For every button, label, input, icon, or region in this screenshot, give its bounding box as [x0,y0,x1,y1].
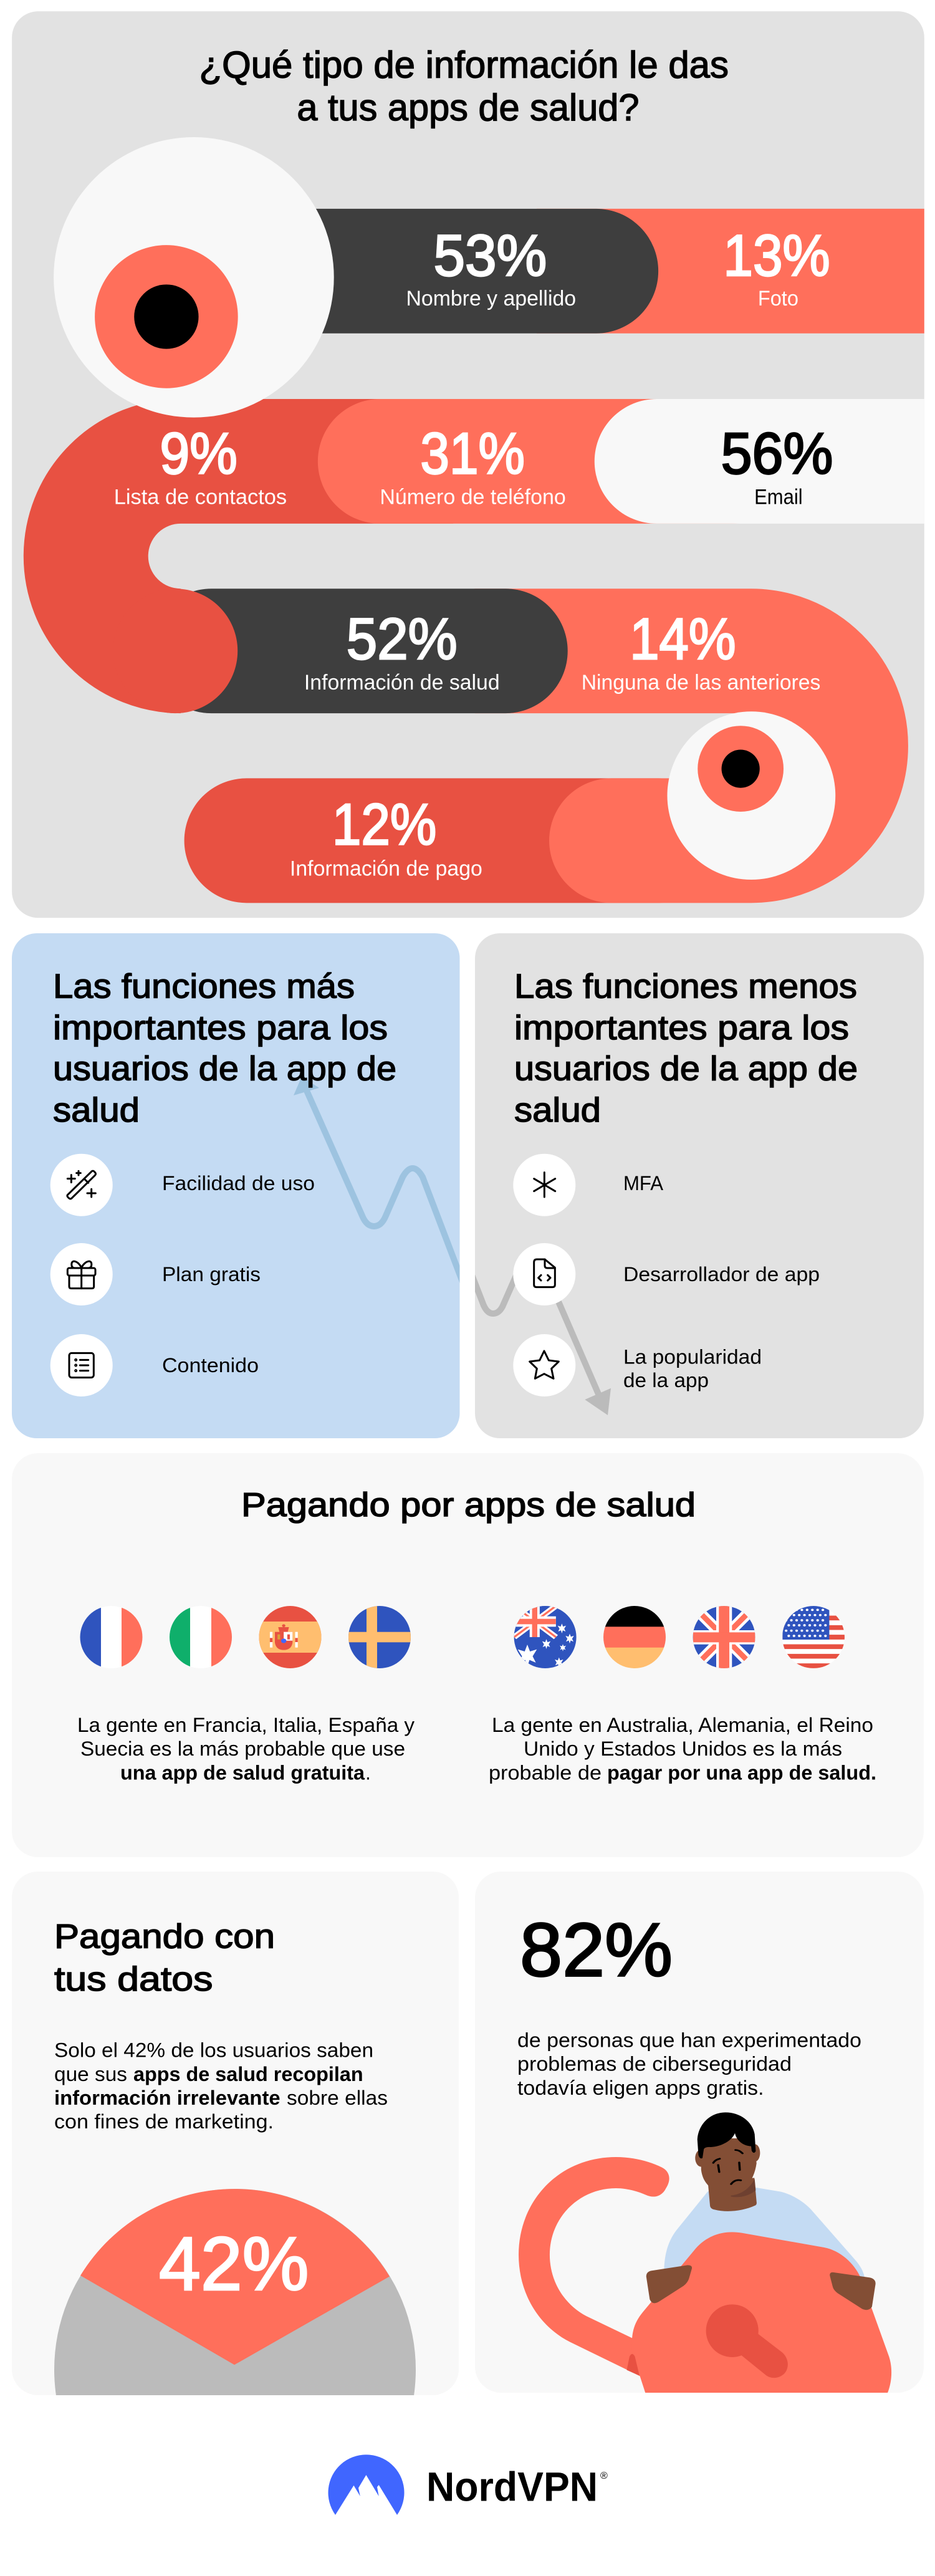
label: app popularity [623,1346,762,1391]
heading: most important: Las funciones más [53,967,355,1006]
stat: 12% payment: Información de pago [290,857,482,880]
stat: 52% health info [304,606,500,694]
text: paid app countries: probable de [489,1761,602,1784]
stat: 53% name [406,223,576,310]
icon: gift [50,1243,113,1305]
panel: paying with your data [54,1923,416,2395]
text block [517,2029,861,2099]
text block: con fines de marketing. [54,2110,274,2133]
heading: most important: salud [53,1090,140,1129]
pie chart: 42% [54,2189,416,2395]
flag: Sweden [348,1606,411,1668]
label: app popularity: de la app [623,1369,709,1391]
icon: star [513,1334,575,1396]
text block [54,2039,388,2133]
heading [54,1917,275,1998]
stat: 52% health info: 52% [347,606,458,671]
text block: apps de salud recopilan [133,2063,363,2085]
heading: tus datos [54,1959,213,1998]
icon: magic wand [50,1154,113,1216]
stat: 9% contacts: Lista de contactos [114,485,287,509]
panel: least important features [471,933,924,1438]
logo: NordVPN [328,2454,608,2515]
text block: de personas que han experimentado [517,2029,861,2051]
stat: 56% email: 56% [721,421,833,486]
title [199,43,729,128]
text: free app countries: La gente en Francia, Italia, España y [77,1714,415,1736]
flag: France [80,1606,143,1668]
icon: large eye [54,137,334,418]
heading: Pagando con [54,1917,275,1956]
big number: 82% [520,1908,673,1992]
heading: least important: Las funciones menos [514,967,857,1006]
text block: problemas de ciberseguridad [517,2053,792,2075]
panel: paying for health apps [79,1491,875,1784]
stat: 13% photo [723,223,830,310]
flag: United Kingdom [693,1606,756,1668]
label: app developer: Desarrollador de app [623,1263,820,1286]
text: free app countries [77,1714,415,1784]
stat: 31% phone: Número de teléfono [380,485,566,509]
label: free plan: Plan gratis [162,1263,261,1286]
heading: least important: salud [514,1090,601,1129]
stat: 56% email: Email [754,485,803,509]
stat: 52% health info: Información de salud [304,671,500,694]
label: MFA: MFA [623,1172,664,1194]
panel: most important features [12,933,464,1438]
stat: 12% payment: 12% [332,792,436,857]
stat: 9% contacts [114,421,287,509]
stat: 53% name: Nombre y apellido [406,287,576,310]
text: paid app countries: La gente en Australia, Alemania, el Reino [492,1714,873,1736]
label: content: Contenido [162,1354,259,1377]
text block: todavía eligen apps gratis. [517,2077,764,2099]
title: a tus apps de salud? [297,86,640,128]
icon: content list [50,1334,113,1396]
label: ease of use: Facilidad de uso [162,1172,315,1194]
stat: 14% none [582,606,820,694]
flag: Australia [514,1606,577,1668]
stat: 53% name: 53% [433,223,547,288]
icon: code file [513,1243,575,1305]
flag: Italy [170,1606,233,1668]
stat: 9% contacts: 9% [160,421,237,486]
stat: 31% phone: 31% [420,421,525,486]
heading: least important: usuarios de la app de [514,1049,858,1087]
flag: United States [782,1606,845,1668]
registered mark: ® [600,2471,608,2481]
stat: 31% phone [380,421,566,509]
snake chart bands [86,209,924,903]
icon: mountain logo mark [328,2454,404,2515]
flag: Spain [259,1606,322,1668]
icon: small eye [667,711,835,880]
text: free app countries: Suecia es la más probable que use [80,1737,405,1760]
heading: most important: usuarios de la app de [53,1049,396,1087]
label: app popularity: La popularidad [623,1346,762,1368]
wordmark: NordVPN [426,2464,598,2510]
text: paid app countries [489,1714,876,1784]
text block: información irrelevante [54,2087,280,2109]
icon: asterisk [513,1154,575,1216]
illustration: person holding padlock [519,2112,891,2394]
stat: 14% none: Ninguna de las anteriores [582,671,820,694]
text block: que sus [54,2063,127,2085]
text block: Solo el 42% de los usuarios saben [54,2039,373,2062]
heading: least important [514,967,858,1129]
text block: sobre ellas [287,2087,388,2109]
pie chart: 42%: 42% [159,2221,309,2306]
heading: most important [53,967,396,1129]
heading: most important: importantes para los [53,1008,388,1047]
arrow: blue trend line [294,1077,464,1287]
stat: 13% photo: Foto [758,287,798,310]
stat: 13% photo: 13% [723,223,830,288]
heading: Pagando por apps de salud [241,1486,696,1524]
panel: 82% free apps [517,1922,891,2393]
panel: what information you give to health apps [12,11,924,918]
title: ¿Qué tipo de información le das [199,43,729,85]
text: free app countries: una app de salud gratuita [120,1761,365,1784]
arrow: gray trend line [471,1264,611,1415]
flag: Germany [603,1606,666,1669]
heading: least important: importantes para los [514,1008,849,1047]
text: free app countries: . [365,1761,371,1784]
stat: 14% none: 14% [630,606,736,671]
text: paid app countries: pagar por una app de salud. [607,1761,876,1784]
stat: 12% payment [290,792,482,880]
text: paid app countries: Unido y Estados Unidos es la más [524,1737,842,1760]
